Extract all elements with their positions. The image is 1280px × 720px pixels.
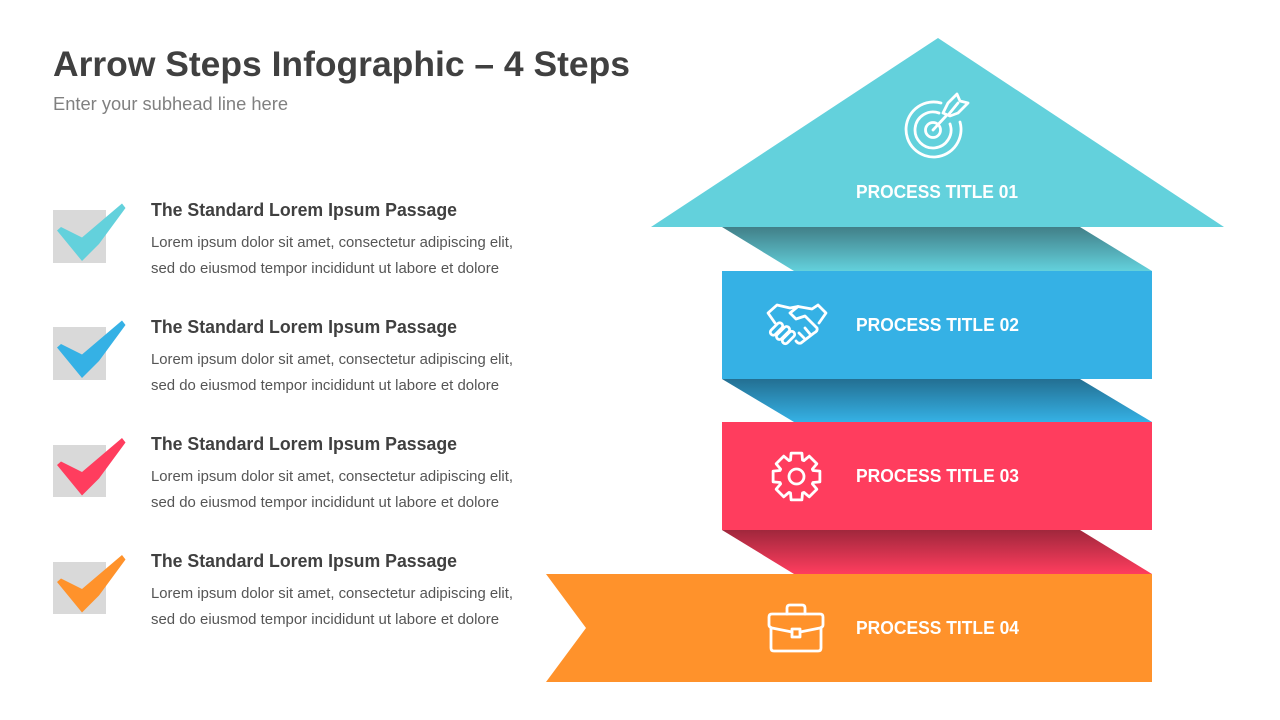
text 3: sed do eiusmod tempor incididunt ut labore et dolore: [151, 495, 499, 511]
label 1: PROCESS TITLE 01: [856, 182, 1018, 202]
heading 1: The Standard Lorem Ipsum Passage: [151, 200, 457, 220]
heading 4: The Standard Lorem Ipsum Passage: [151, 551, 457, 571]
text 1: Lorem ipsum dolor sit amet, consectetur adipiscing elit,: [151, 235, 513, 251]
list item 1: [53, 200, 513, 277]
label 3: PROCESS TITLE 03: [856, 466, 1019, 486]
heading 3: The Standard Lorem Ipsum Passage: [151, 434, 457, 454]
fold: red: [722, 530, 1152, 574]
icon: handshake: [768, 305, 826, 345]
step 1: arrow head: [651, 38, 1224, 227]
fold: teal: [722, 227, 1152, 271]
label 4: PROCESS TITLE 04: [856, 618, 1019, 638]
step 3: red band: [722, 422, 1152, 530]
text 4: Lorem ipsum dolor sit amet, consectetur adipiscing elit,: [151, 586, 513, 602]
text 4: sed do eiusmod tempor incididunt ut labore et dolore: [151, 612, 499, 628]
list item 3: [53, 434, 513, 511]
text 1: [151, 235, 513, 277]
text 2: Lorem ipsum dolor sit amet, consectetur adipiscing elit,: [151, 352, 513, 368]
subhead: Enter your subhead line here: [53, 93, 288, 114]
fold: blue: [722, 379, 1152, 422]
checkbox 4: [53, 555, 126, 614]
heading 2: The Standard Lorem Ipsum Passage: [151, 317, 457, 337]
text 3: Lorem ipsum dolor sit amet, consectetur adipiscing elit,: [151, 469, 513, 485]
icon: briefcase: [769, 605, 823, 651]
text 4: [151, 586, 513, 628]
icon: target: [906, 94, 968, 157]
list item 2: [53, 317, 513, 394]
text 1: sed do eiusmod tempor incididunt ut labore et dolore: [151, 261, 499, 277]
text 3: [151, 469, 513, 511]
step 2: blue band: [722, 271, 1152, 379]
checkbox 3: [53, 438, 126, 497]
title: Arrow Steps Infographic – 4 Steps: [53, 45, 630, 84]
label 2: PROCESS TITLE 02: [856, 315, 1019, 335]
checkbox 1: [53, 204, 126, 263]
list item 4: [53, 551, 513, 628]
step 4: orange tail band: [546, 574, 1152, 682]
text 2: [151, 352, 513, 394]
text 2: sed do eiusmod tempor incididunt ut labore et dolore: [151, 378, 499, 394]
icon: gear: [773, 453, 820, 500]
checkbox 2: [53, 320, 126, 380]
